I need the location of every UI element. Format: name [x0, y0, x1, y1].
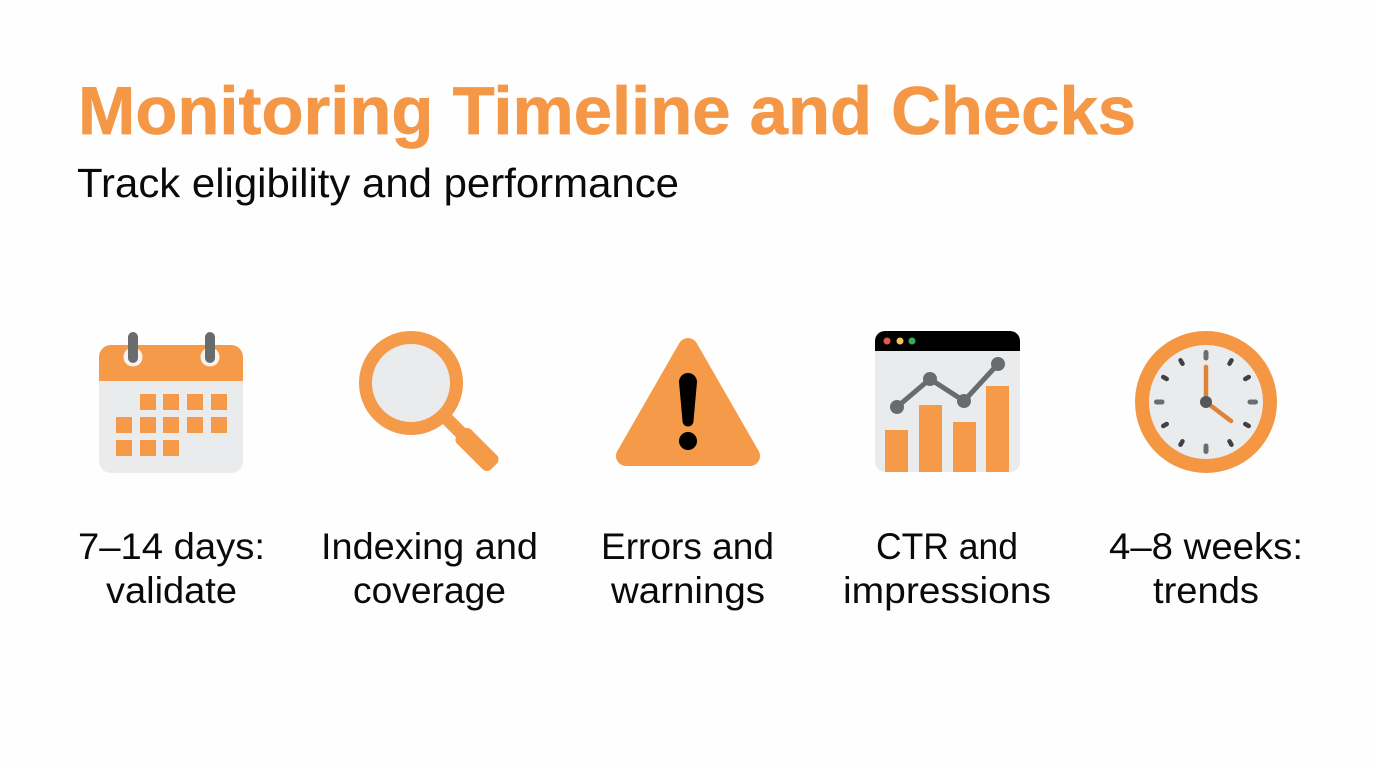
label: 7–14 days validate — [78, 526, 265, 611]
icon: browser analytics chart — [875, 331, 1020, 472]
label: errors and warnings: Errors and — [601, 526, 774, 567]
label: 4–8 weeks trends: trends — [1153, 570, 1259, 611]
label: 4–8 weeks trends — [1109, 526, 1303, 611]
label: indexing and coverage: coverage — [353, 570, 506, 611]
label: indexing and coverage: Indexing and — [321, 526, 538, 567]
icon: magnifying glass — [366, 338, 501, 474]
icon: warning triangle — [626, 348, 750, 456]
label: CTR and impressions — [843, 526, 1051, 611]
label: 7–14 days validate: 7–14 days: — [78, 526, 265, 567]
icon: calendar — [99, 332, 243, 473]
label: indexing and coverage — [321, 526, 538, 611]
label: CTR and impressions: impressions — [843, 570, 1051, 611]
label: errors and warnings: warnings — [610, 570, 765, 611]
icon: clock — [1142, 338, 1270, 466]
subtitle: Track eligibility and performance — [77, 160, 679, 206]
label: 7–14 days validate: validate — [106, 570, 237, 611]
label: errors and warnings — [601, 526, 774, 611]
label: CTR and impressions: CTR and — [876, 526, 1018, 567]
title: Monitoring Timeline and Checks — [78, 73, 1136, 149]
label: 4–8 weeks trends: 4–8 weeks: — [1109, 526, 1303, 567]
